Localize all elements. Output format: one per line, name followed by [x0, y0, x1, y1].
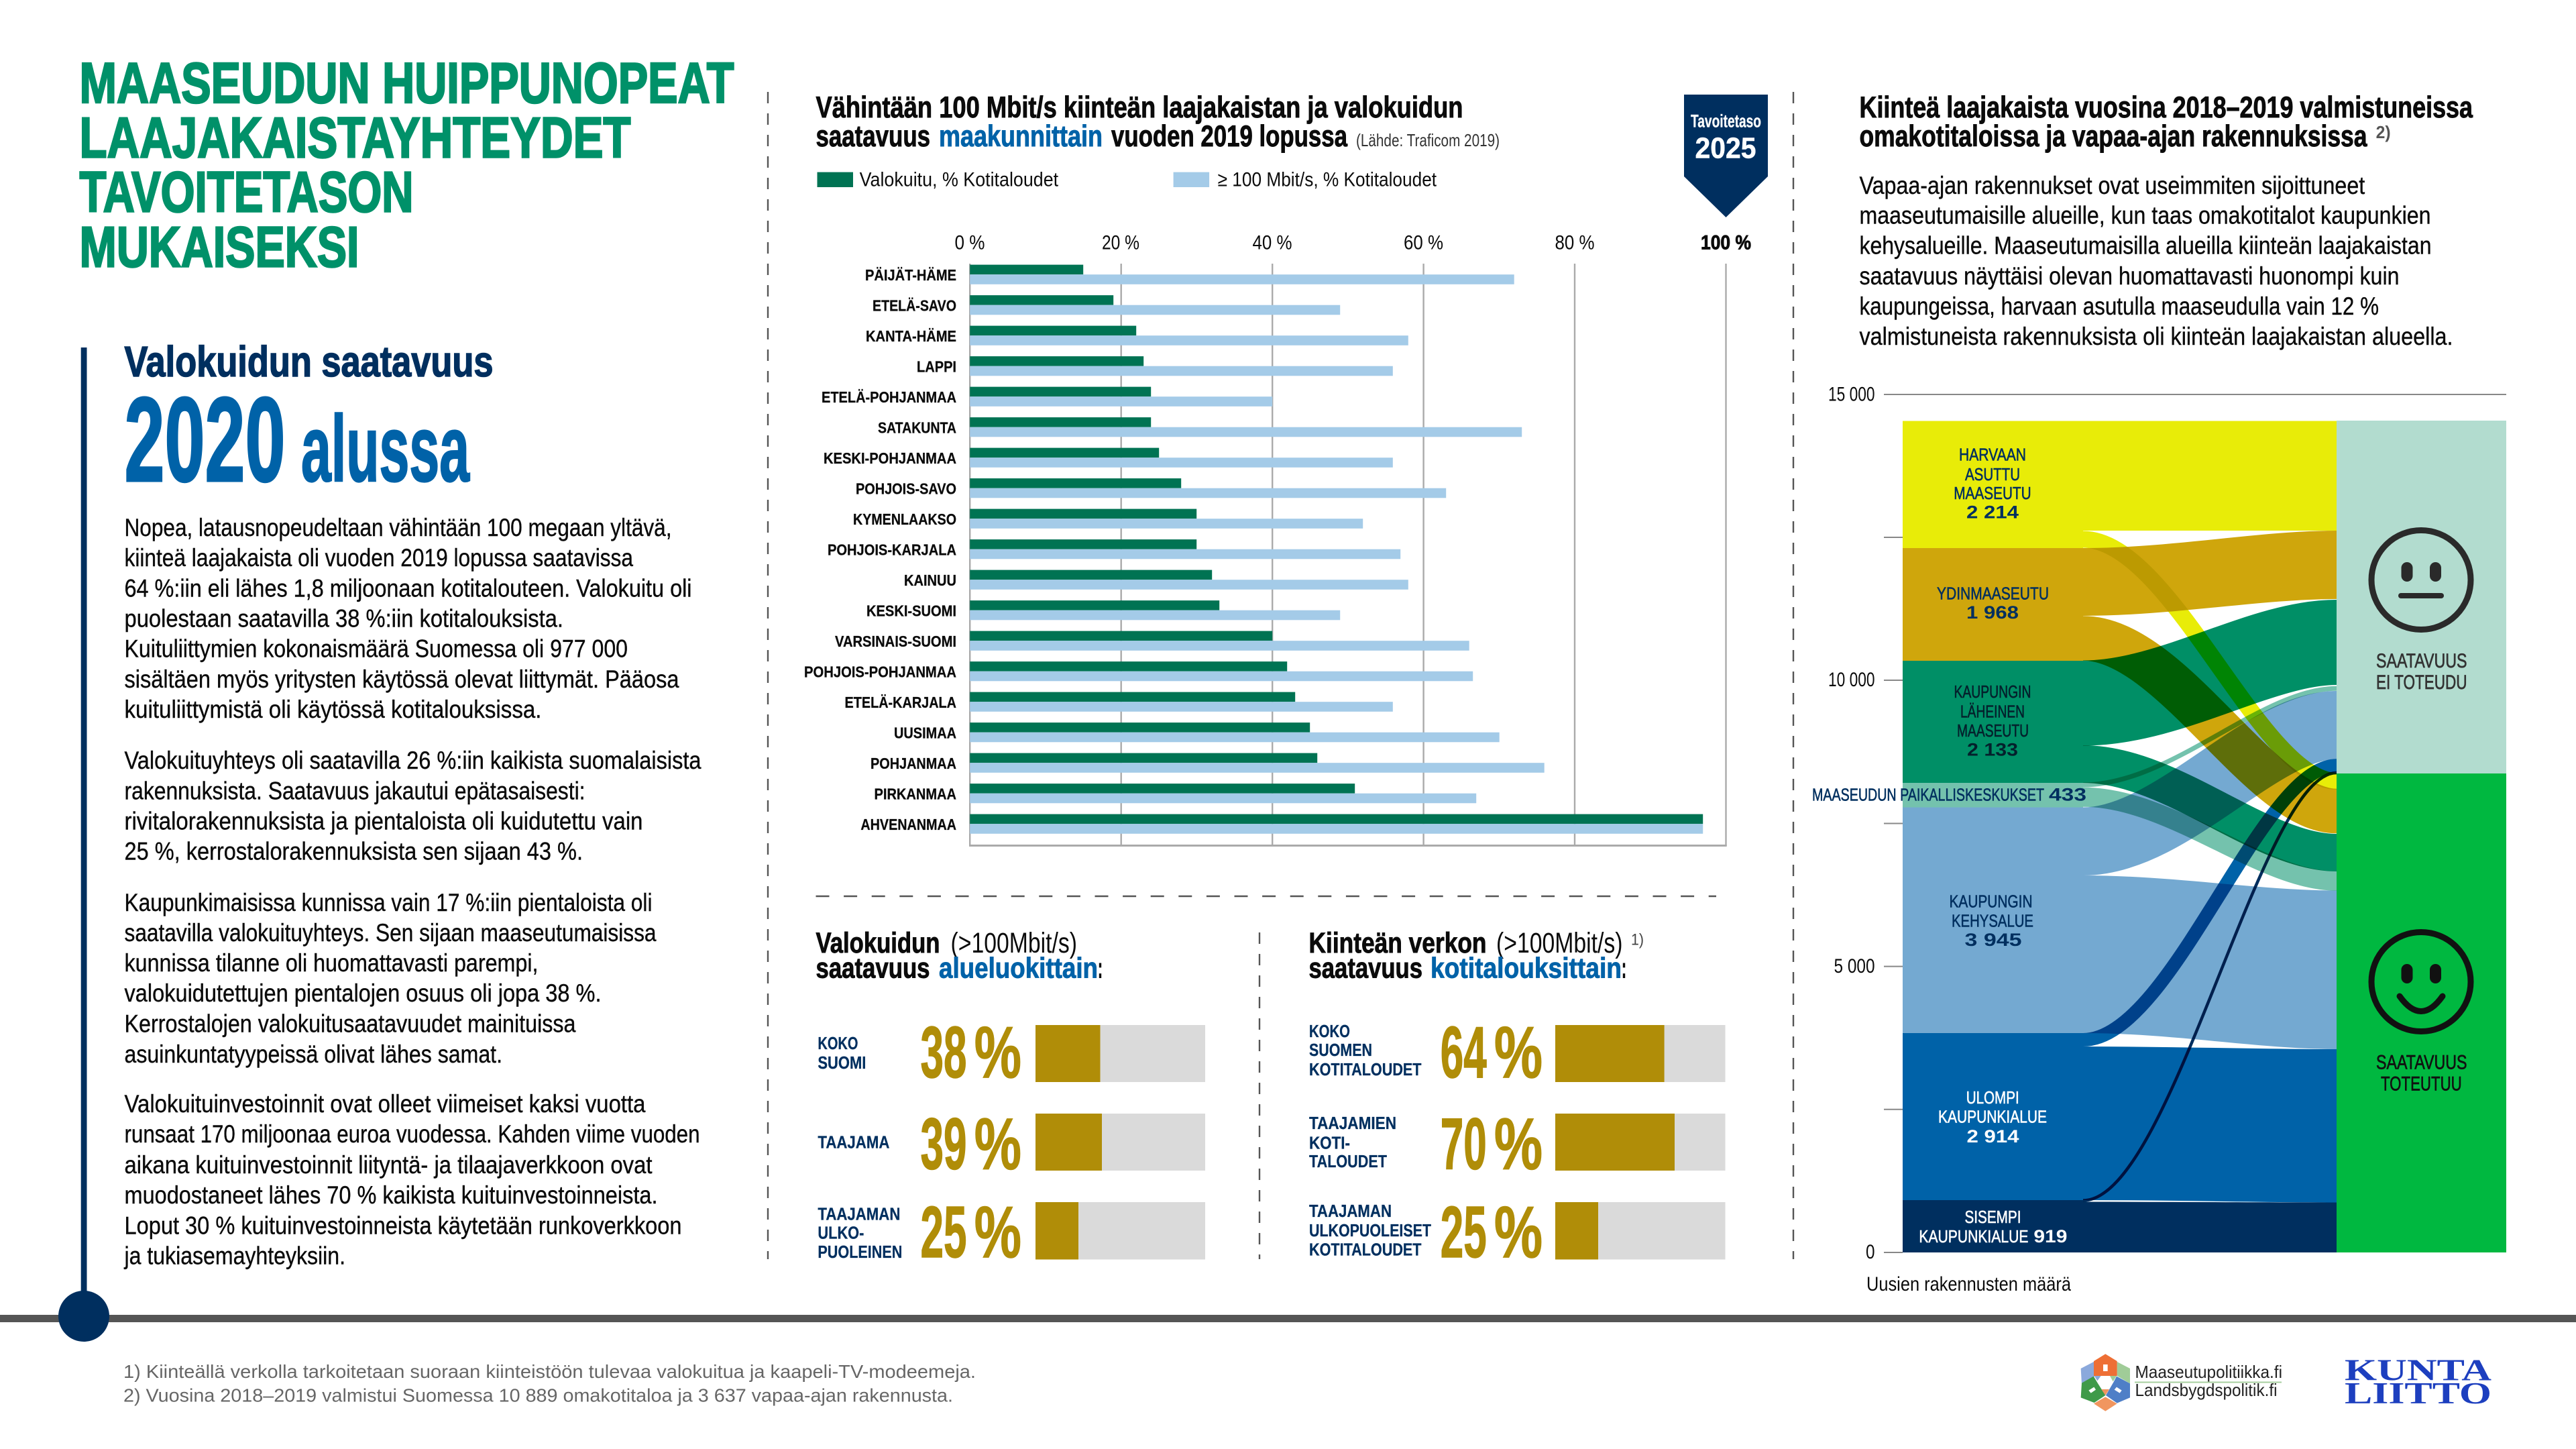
text block: paragraph 3: Kerrostalojen valokuitusaatavuudet mainituissa [125, 1010, 576, 1037]
row: Etelä-Pohjanmaa: ETELÄ-POHJANMAA [822, 388, 956, 406]
text block: sankey intro: kaupungeissa, harvaan asutulla maaseudulla vain 12 % [1859, 292, 2379, 320]
legend [817, 169, 1437, 191]
stat row: Taajaman ulkopuolinen 25 %: ULKO- [818, 1223, 864, 1243]
row: Pohjois-Pohjanmaa [804, 661, 1473, 681]
row: Ahvenanmaa: AHVENANMAA [860, 816, 956, 833]
footnotes: 1) Kiinteällä verkolla tarkoitetaan suoraan kiinteistöön tulevaa valokuitua ja kaapeli-TV-modeemeja. [123, 1361, 976, 1382]
heading: 2020 alussa: alussa [301, 396, 470, 501]
stat row: Koko Suomen kotitaloudet 64 %: KOTITALOUDET [1309, 1059, 1422, 1079]
label: Maaseudun paikalliskeskukset: 433 [2049, 785, 2086, 805]
y axis labels: 15 000 [1828, 384, 1875, 405]
stat row: Taajamien kotitaloudet 70 %: TALOUDET [1309, 1151, 1387, 1171]
label: Harvaan asuttu maaseutu: ASUTTU [1965, 464, 2020, 484]
footnotes [123, 1361, 976, 1406]
text block: paragraph 4: Valokuituinvestoinnit ovat olleet viimeiset kaksi vuotta [125, 1090, 646, 1118]
legend: Valokuitu, % Kotitaloudet [860, 169, 1059, 191]
row: Pohjois-Pohjanmaa: POHJOIS-POHJANMAA [804, 663, 956, 680]
y axis labels: 0 [1866, 1241, 1875, 1263]
heading: by household: 1) [1631, 931, 1644, 949]
title: MAASEUDUN HUIPPUNOPEAT [79, 52, 734, 115]
row: Lappi: LAPPI [917, 358, 956, 376]
stat row: Taajaman ulkopuoliset kotitaloudet 25 %: TAAJAMAN [1309, 1201, 1392, 1221]
logo: Maaseutupolitiikka: Landsbygdspolitik.fi [2135, 1380, 2278, 1400]
heading: by household: kotitalouksittain [1431, 953, 1622, 985]
heading: regional chart: maakunnittain [939, 120, 1103, 153]
stat row: Taajama 39 % [818, 1103, 1205, 1185]
row: Varsinais-Suomi [835, 631, 1469, 651]
stat row: Taajaman ulkopuolinen 25 %: PUOLEINEN [818, 1242, 902, 1262]
stat row: Taajamien kotitaloudet 70 %: TAAJAMIEN [1309, 1113, 1396, 1133]
title: LAAJAKAISTAYHTEYDET [79, 107, 631, 170]
row: Kymenlaakso: KYMENLAAKSO [853, 511, 956, 528]
title [79, 52, 734, 279]
text block: paragraph 2: rivitalorakennuksista ja pientaloista oli kuidutettu vain [125, 808, 642, 835]
row: Pohjois-Savo: POHJOIS-SAVO [856, 480, 956, 498]
stat row: Taajaman ulkopuoliset kotitaloudet 25 %: 25 [1441, 1191, 1487, 1273]
label: Kaupungin kehysalue: KEHYSALUE [1952, 910, 2033, 930]
y axis labels: 5 000 [1834, 955, 1875, 977]
text block: paragraph 3: valokuidutettujen pientalojen osuus oli jopa 38 %. [125, 979, 601, 1007]
heading: by area class: Valokuidun [816, 927, 940, 959]
stat row: Koko Suomen kotitaloudet 64 %: 64 [1441, 1012, 1487, 1093]
stat row: Taajaman ulkopuoliset kotitaloudet 25 % [1309, 1191, 1725, 1273]
text block: paragraph 1: kiinteä laajakaista oli vuoden 2019 lopussa saatavissa [125, 544, 633, 572]
stat row: Taajamien kotitaloudet 70 %: 70 [1441, 1103, 1487, 1185]
stat row: Taajamien kotitaloudet 70 %: KOTI- [1309, 1133, 1350, 1153]
axis labels: 60 % [1404, 232, 1443, 254]
stat row: Koko Suomen kotitaloudet 64 %: SUOMEN [1309, 1040, 1372, 1060]
label: Kaupungin kehysalue: 3 945 [1965, 930, 2021, 950]
title: MUKAISEKSI [79, 215, 359, 279]
row: Päijät-Häme [865, 265, 1514, 284]
row: Etelä-Karjala: ETELÄ-KARJALA [845, 694, 956, 711]
text block: paragraph 1: sisältäen myös yritysten käytössä olevat liittymät. Pääosa [125, 665, 679, 693]
stat row: Taajaman ulkopuolinen 25 %: TAAJAMAN [818, 1204, 900, 1224]
stat row: Koko Suomi 38 % [818, 1012, 1205, 1093]
row: Satakunta: SATAKUNTA [878, 419, 956, 436]
text block: paragraph 4: runsaat 170 miljoonaa euroa vuodessa. Kahden viime vuoden [125, 1120, 700, 1148]
panel: new buildings sankey [1812, 91, 2506, 1295]
stat row: Koko Suomen kotitaloudet 64 %: % [1494, 1012, 1543, 1093]
label: Ydinmaaseutu: 1 968 [1966, 602, 2019, 623]
text block: paragraph 1: 64 %:iin eli lähes 1,8 miljoonaan kotitalouteen. Valokuitu oli [125, 574, 692, 602]
label: Saatavuus ei toteudu: EI TOTEUDU [2376, 672, 2467, 694]
heading: regional chart [816, 91, 1500, 153]
banner: target level 2025: Tavoitetaso [1691, 111, 1761, 131]
column: not available [2337, 421, 2506, 773]
text block: paragraph 4 [124, 1090, 700, 1269]
text block: paragraph 4: ja tukiasemayhteyksiin. [124, 1242, 345, 1269]
heading: by area class [816, 927, 1103, 985]
text block: paragraph 3 [125, 889, 657, 1068]
heading: by household: saatavuus [1309, 953, 1422, 985]
row: Pirkanmaa [875, 784, 1476, 803]
text block: paragraph 2: 25 %, kerrostalorakennuksista sen sijaan 43 %. [125, 837, 583, 865]
row: Uusimaa [894, 722, 1500, 742]
label: Kaupungin läheinen maaseutu: KAUPUNGIN [1954, 682, 2031, 702]
label: Saatavuus toteutuu [2376, 1051, 2467, 1095]
stat row: Koko Suomen kotitaloudet 64 %: KOKO [1309, 1021, 1350, 1041]
sankey flows [1903, 421, 2337, 1252]
footer divider line [0, 1315, 2576, 1322]
banner: target level 2025 [1684, 95, 1768, 217]
heading: regional chart: saatavuus [816, 120, 930, 153]
legend: ≥ 100 Mbit/s, % Kotitaloudet [1218, 169, 1437, 191]
row: Keski-Pohjanmaa: KESKI-POHJANMAA [824, 449, 956, 467]
row: Kanta-Häme: KANTA-HÄME [866, 327, 956, 345]
stat row: Taajamien kotitaloudet 70 %: % [1494, 1103, 1543, 1185]
y axis labels: Uusien rakennusten määrä [1866, 1273, 2071, 1295]
logo: Kuntaliitto: LIITTO [2345, 1377, 2491, 1410]
row: Kainuu: KAINUU [904, 572, 956, 589]
text block: paragraph 1: puolestaan saatavilla 38 %:iin kotitalouksista. [125, 605, 563, 632]
y axis labels: 10 000 [1828, 669, 1875, 691]
stat row: Taajaman ulkopuolinen 25 % [818, 1191, 1205, 1273]
row: Etelä-Karjala [845, 692, 1393, 712]
label: Harvaan asuttu maaseutu: 2 214 [1966, 502, 2019, 522]
label: Ulompi kaupunkialue [1938, 1087, 2047, 1146]
heading: new buildings: 2) [2376, 122, 2391, 142]
row: Kanta-Häme [866, 326, 1408, 345]
text block: sankey intro: saatavuus näyttäisi olevan huomattavasti huonompi kuin [1859, 262, 2400, 290]
row: Pohjois-Karjala: POHJOIS-KARJALA [828, 541, 956, 558]
heading: by area class: saatavuus [816, 953, 930, 985]
text block: sankey intro: maaseutumaisille alueille, kun taas omakotitalot kaupunkien [1859, 202, 2430, 229]
label: Sisempi kaupunkialue [1919, 1207, 2067, 1246]
stat row: Koko Suomi 38 %: SUOMI [818, 1053, 866, 1073]
text block: sankey intro: Vapaa-ajan rakennukset ovat useimmiten sijoittuneet [1859, 172, 2365, 199]
row: Etelä-Savo: ETELÄ-SAVO [873, 297, 956, 314]
stat row: Taajamien kotitaloudet 70 % [1309, 1103, 1725, 1185]
label: Ulompi kaupunkialue: 2 914 [1966, 1126, 2019, 1146]
stat row: Taajaman ulkopuoliset kotitaloudet 25 %: % [1494, 1191, 1543, 1273]
logo: Maaseutupolitiikka [2081, 1354, 2282, 1411]
panel: fibre availability by area class: : [1098, 953, 1103, 985]
label: Kaupungin kehysalue [1949, 892, 2033, 950]
logo: Kuntaliitto: KUNTA [2345, 1354, 2492, 1387]
y axis labels [1828, 384, 2071, 1295]
banner: target level 2025: 2025 [1695, 131, 1756, 165]
row: Pohjois-Savo [856, 478, 1446, 498]
row: Etelä-Savo [873, 295, 1340, 315]
heading: by household: Kiinteän verkon [1309, 927, 1486, 959]
row: Etelä-Pohjanmaa [822, 387, 1272, 407]
row: Kainuu [904, 570, 1408, 590]
label: Harvaan asuttu maaseutu: HARVAAN [1959, 445, 2026, 465]
label: Ulompi kaupunkialue: KAUPUNKIALUE [1938, 1106, 2047, 1126]
label: Ulompi kaupunkialue: ULOMPI [1966, 1087, 2019, 1108]
stat row: Taajama 39 %: TAAJAMA [818, 1132, 890, 1152]
heading: new buildings: omakotitaloissa ja vapaa-ajan rakennuksissa [1859, 120, 2367, 153]
label: Sisempi kaupunkialue: 919 [2033, 1226, 2067, 1246]
text block: sankey intro [1859, 172, 2453, 350]
label: Kaupungin läheinen maaseutu: MAASEUTU [1957, 720, 2029, 741]
text block: paragraph 3: asuinkuntatyypeissä olivat lähes samat. [125, 1040, 502, 1068]
label: Kaupungin läheinen maaseutu: LÄHEINEN [1960, 702, 2025, 722]
heading: by area class: alueluokittain [939, 953, 1098, 985]
text block: paragraph 4: muodostaneet lähes 70 % kaikista kuituinvestoinneista. [125, 1181, 657, 1209]
axis labels: 20 % [1102, 232, 1139, 254]
panel: fibre availability text [124, 337, 702, 1269]
heading: regional chart: Vähintään 100 Mbit/s kiinteän laajakaistan ja valokuidun [816, 91, 1463, 124]
stat row: Taajama 39 %: % [974, 1103, 1021, 1185]
heading: by household: : [1622, 953, 1626, 985]
label: Saatavuus toteutuu: TOTEUTUU [2381, 1073, 2462, 1095]
label: Harvaan asuttu maaseutu: MAASEUTU [1954, 483, 2031, 503]
row: Keski-Pohjanmaa [824, 448, 1393, 468]
axis labels [955, 232, 1751, 254]
row: Keski-Suomi [866, 600, 1340, 620]
label: Sisempi kaupunkialue: SISEMPI [1965, 1207, 2021, 1227]
label: Ydinmaaseutu [1937, 583, 2049, 623]
logo: Kuntaliitto [2345, 1354, 2492, 1410]
row: Varsinais-Suomi: VARSINAIS-SUOMI [835, 633, 956, 650]
panel: fibre availability by area class [816, 927, 1205, 1273]
row: Kymenlaakso [853, 509, 1363, 529]
text block: paragraph 3: kunnissa tilanne oli huomattavasti parempi, [125, 949, 538, 977]
text block: paragraph 2 [125, 747, 702, 865]
heading: Valokuidun saatavuus: Valokuidun saatavuus [125, 337, 494, 386]
stat row: Taajaman ulkopuolinen 25 %: % [974, 1191, 1021, 1273]
row: Pohjois-Karjala [828, 539, 1400, 559]
label: Kaupungin läheinen maaseutu [1954, 682, 2031, 760]
icon: neutral face [2371, 530, 2471, 629]
panel: fixed network availability by household [1309, 927, 1725, 1273]
row: Uusimaa: UUSIMAA [894, 724, 956, 742]
label: Harvaan asuttu maaseutu [1954, 445, 2031, 522]
text block: paragraph 3: saatavilla valokuituyhteys. Sen sijaan maaseutumaisissa [125, 919, 657, 947]
text block: sankey intro: kehysalueille. Maaseutumaisilla alueilla kiinteän laajakaistan [1859, 232, 2432, 260]
row: Lappi [917, 356, 1393, 376]
stat row: Koko Suomi 38 %: KOKO [818, 1033, 858, 1053]
axis labels: 80 % [1555, 232, 1595, 254]
row: Pohjanmaa [871, 753, 1545, 773]
text block: paragraph 2: Valokuituyhteys oli saatavilla 26 %:iin kaikista suomalaisista [125, 747, 702, 774]
label: Saatavuus ei toteudu: SAATAVUUS [2376, 650, 2467, 672]
text block: paragraph 2: rakennuksista. Saatavuus jakautui epätasaisesti: [125, 777, 585, 805]
stat row: Koko Suomen kotitaloudet 64 % [1309, 1012, 1725, 1093]
row: Päijät-Häme: PÄIJÄT-HÄME [865, 266, 956, 284]
label: Saatavuus toteutuu: SAATAVUUS [2376, 1051, 2467, 1073]
row: Keski-Suomi: KESKI-SUOMI [866, 602, 956, 620]
label: Sisempi kaupunkialue: KAUPUNKIALUE [1919, 1226, 2028, 1246]
stat row: Taajaman ulkopuoliset kotitaloudet 25 %: KOTITALOUDET [1309, 1240, 1422, 1260]
axis labels: 100 % [1701, 232, 1751, 254]
panel: regional availability bar chart [804, 91, 1768, 846]
heading: regional chart: vuoden 2019 lopussa [1111, 120, 1348, 153]
row: Satakunta [878, 417, 1522, 437]
timeline bar with end dot [58, 347, 109, 1342]
stat row: Koko Suomi 38 %: 38 [920, 1012, 967, 1093]
label: Kaupungin kehysalue: KAUPUNGIN [1949, 892, 2032, 912]
label: Saatavuus ei toteudu [2376, 650, 2467, 694]
heading: by household: (>100Mbit/s) [1496, 927, 1623, 959]
row: Ahvenanmaa [860, 814, 1703, 834]
stat row: Taajaman ulkopuoliset kotitaloudet 25 %: ULKOPUOLEISET [1309, 1220, 1431, 1240]
footnotes: 2) Vuosina 2018–2019 valmistui Suomessa 10 889 omakotitaloa ja 3 637 vapaa-ajan rakennusta. [123, 1385, 953, 1406]
label: Maaseudun paikalliskeskukset: MAASEUDUN PAIKALLISKESKUKSET [1812, 785, 2044, 805]
row: Pirkanmaa: PIRKANMAA [875, 785, 956, 802]
heading: new buildings [1859, 91, 2473, 153]
row: Pohjanmaa: POHJANMAA [871, 755, 956, 772]
icon: happy face [2371, 932, 2471, 1032]
label: Kaupungin läheinen maaseutu: 2 133 [1967, 740, 2018, 760]
title: TAVOITETASON [79, 161, 413, 225]
text block: paragraph 1: kuituliittymistä oli käytössä kotitalouksissa. [125, 696, 542, 723]
heading: by household [1309, 927, 1644, 985]
label: Ydinmaaseutu: YDINMAASEUTU [1937, 583, 2049, 603]
heading: regional chart: (Lähde: Traficom 2019) [1356, 130, 1500, 150]
text block: paragraph 4: aikana kuituinvestoinnit liityntä- ja tilaajaverkkoon ovat [125, 1151, 653, 1179]
axis labels: 40 % [1253, 232, 1292, 254]
text block: paragraph 3: Kaupunkimaisissa kunnissa vain 17 %:iin pientaloista oli [125, 889, 652, 916]
stat row: Taajama 39 %: 39 [920, 1103, 967, 1185]
logo: Maaseutupolitiikka: Maaseutupolitiikka.fi [2135, 1362, 2282, 1382]
axis labels: 0 % [955, 232, 985, 254]
text block: paragraph 1 [125, 514, 692, 723]
stat row: Taajaman ulkopuolinen 25 %: 25 [920, 1191, 967, 1273]
text block: paragraph 1: Nopea, latausnopeudeltaan vähintään 100 megaan yltävä, [125, 514, 672, 541]
stat row: Koko Suomi 38 %: % [974, 1012, 1021, 1093]
text block: paragraph 4: Loput 30 % kuituinvestoinneista käytetään runkoverkkoon [125, 1212, 681, 1240]
text block: sankey intro: valmistuneista rakennuksista oli kiinteän laajakaistan alueella. [1859, 323, 2453, 350]
heading: by area class: (>100Mbit/s) [951, 927, 1077, 959]
heading: 2020 alussa: 2020 [125, 372, 286, 506]
column: available [2337, 773, 2506, 1252]
text block: paragraph 1: Kuituliittymien kokonaismäärä Suomessa oli 977 000 [125, 635, 628, 663]
